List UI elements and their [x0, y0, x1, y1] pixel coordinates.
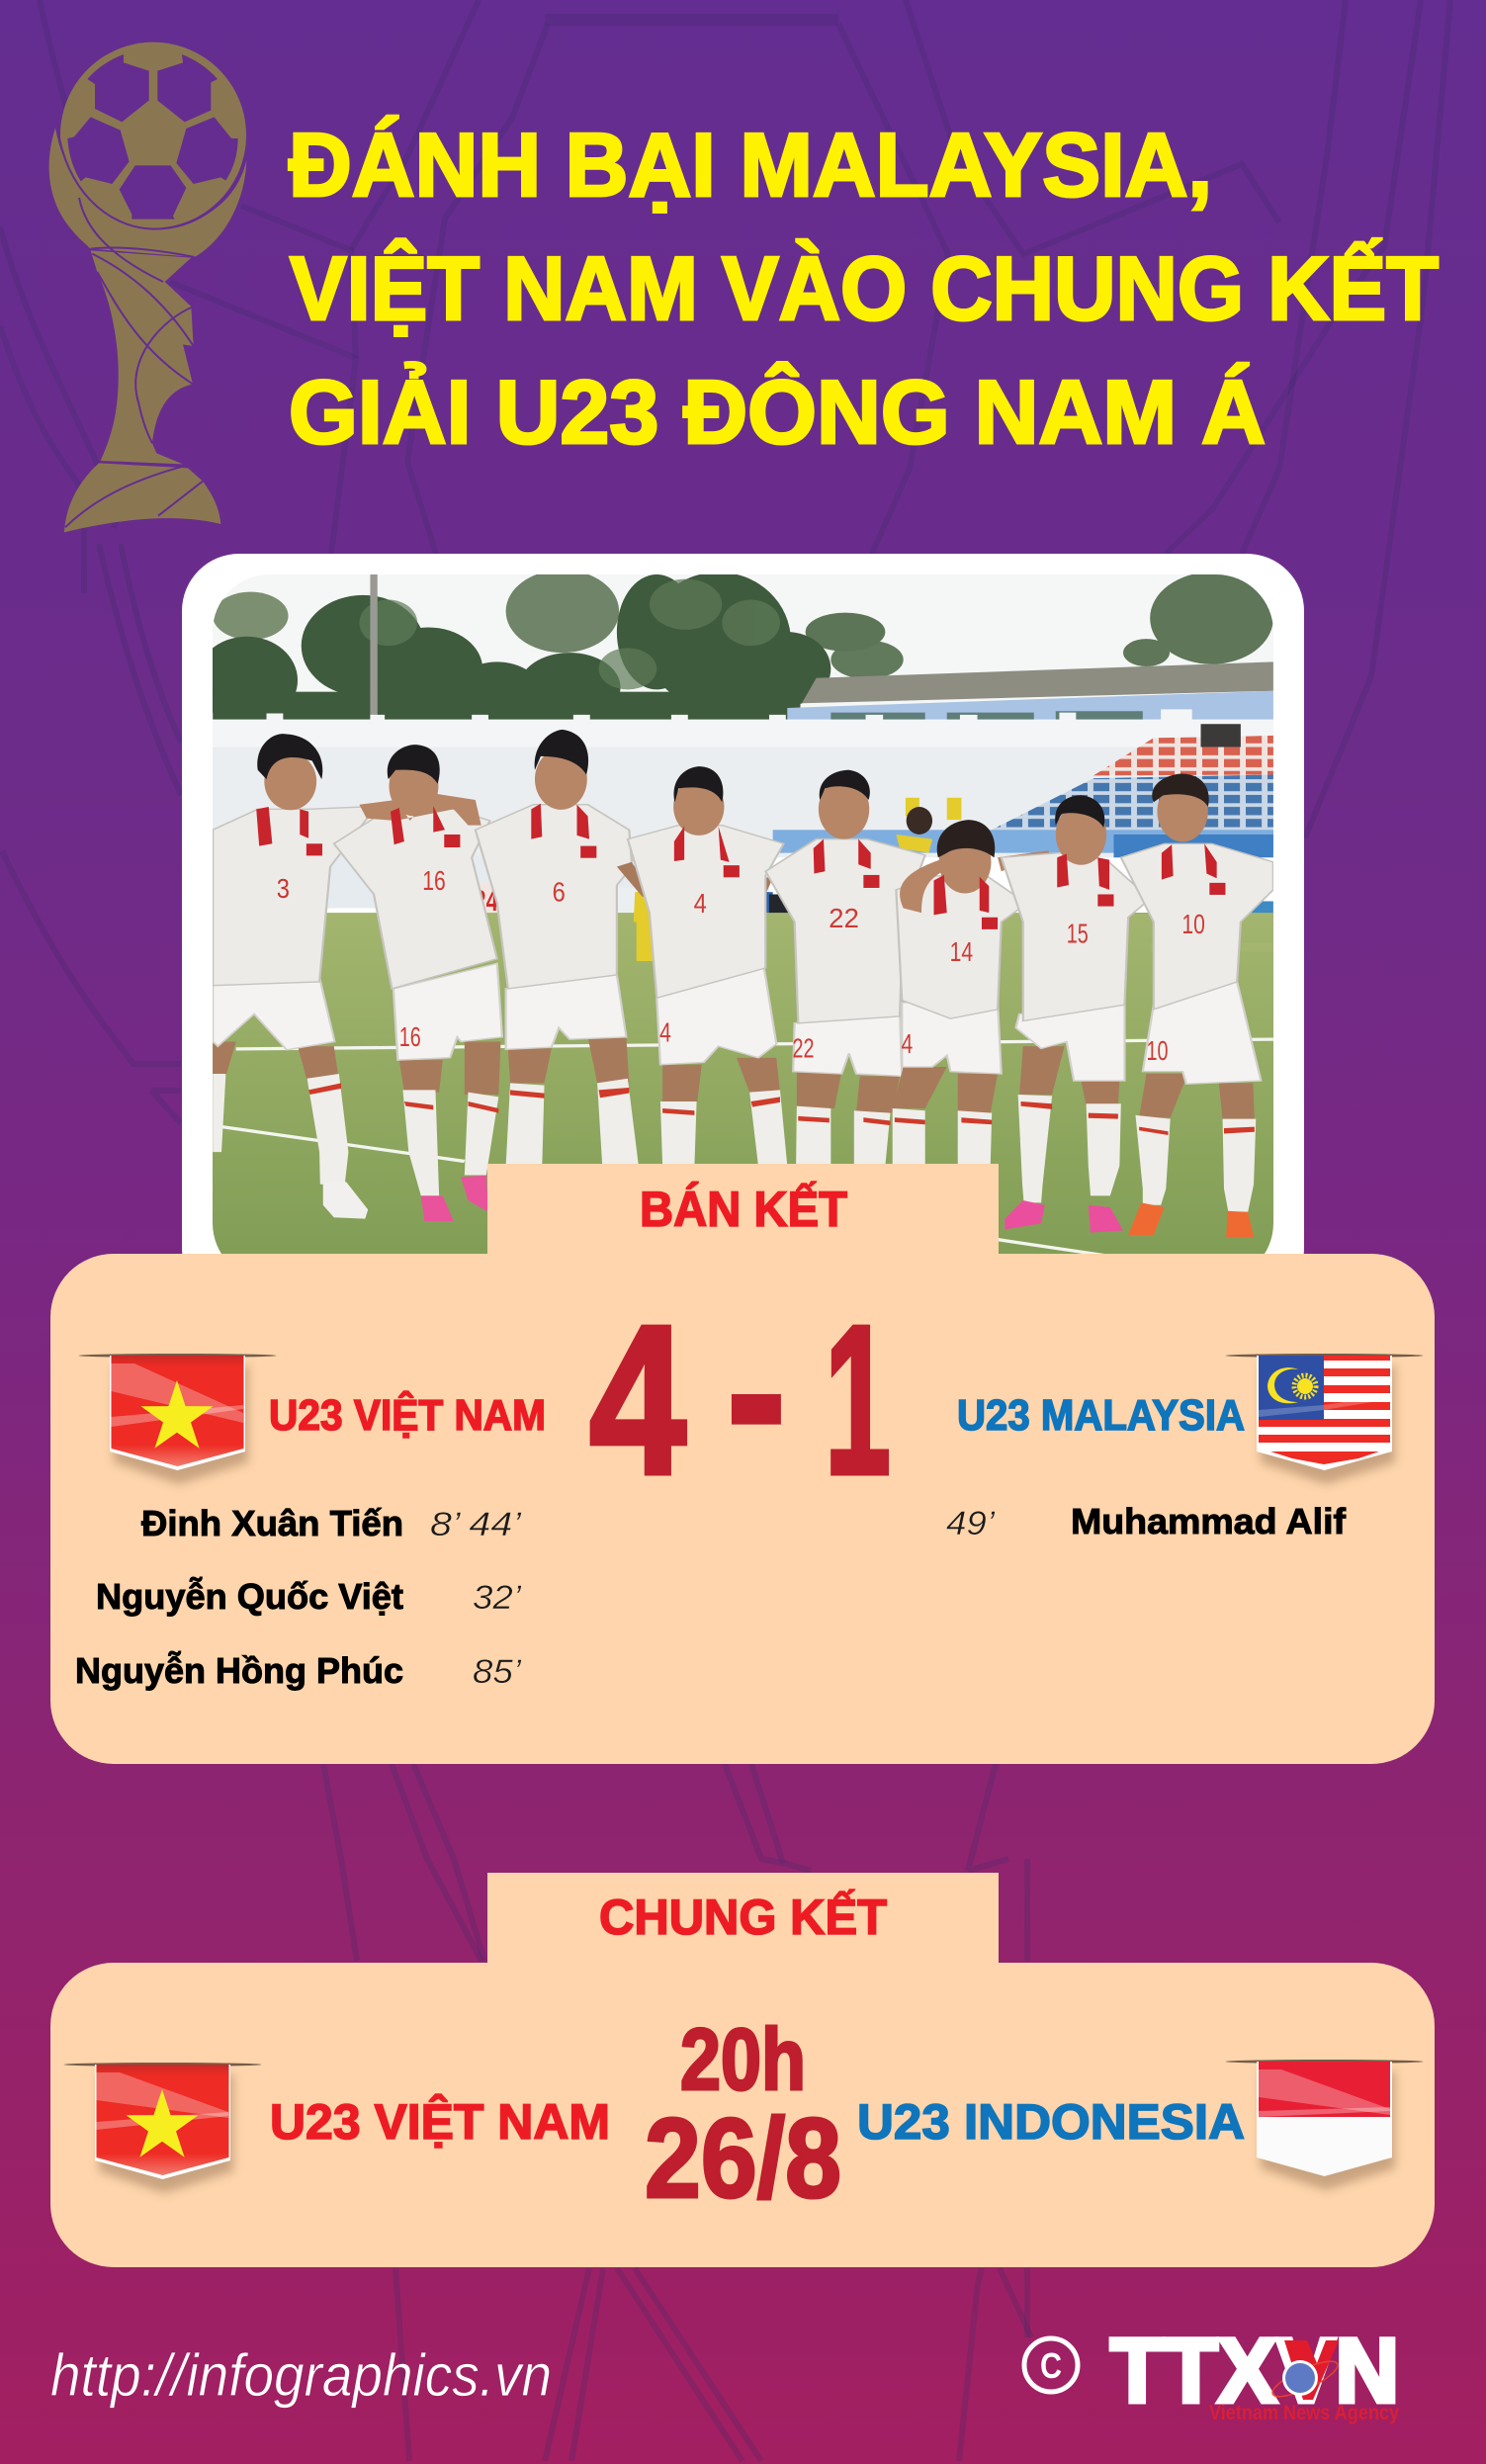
match time and date: 20h — [680, 2010, 806, 2108]
panel: photo white frame — [182, 554, 1304, 1305]
player 3 — [213, 734, 368, 1219]
title: ĐÁNH BẠI MALAYSIA, — [289, 116, 1212, 216]
title: GIẢI U23 ĐÔNG NAM Á — [289, 362, 1266, 463]
player 10: 10 — [1146, 1035, 1169, 1066]
player 3: 3 — [277, 873, 290, 904]
icon: Indonesia flag ribbon — [1226, 2060, 1424, 2190]
player 15: 15 — [1067, 918, 1089, 948]
tab: semi-final heading: BÁN KẾT — [640, 1182, 847, 1237]
photo: team of eight players on the pitch — [196, 570, 1280, 1281]
scoring minutes: Viet Nam: 32’ — [473, 1579, 521, 1617]
grass — [207, 913, 1280, 1281]
scorer: Malaysia: Muhammad Alif — [1071, 1501, 1347, 1541]
score 4 - 1: - — [727, 1272, 786, 1510]
score 4 - 1: 1 — [825, 1280, 891, 1519]
match time and date — [645, 2010, 841, 2222]
player 6: 6 — [553, 876, 566, 908]
score 4 - 1 — [589, 1272, 891, 1519]
player 14: 4 — [901, 1028, 913, 1059]
player 16: 16 — [422, 865, 446, 896]
tab: semi-final heading — [487, 1164, 999, 1255]
icon: copyright mark — [1024, 2338, 1078, 2392]
score 4 - 1: 4 — [589, 1280, 686, 1519]
scorers: Viet Nam: Nguyễn Hồng Phúc — [75, 1650, 403, 1691]
website url: http://infographics.vn — [50, 2342, 552, 2409]
scoring minute: Malaysia: 49’ — [946, 1505, 995, 1542]
player 10 — [1121, 774, 1273, 1237]
icon: gold football trophy — [49, 43, 246, 532]
player 16 — [334, 745, 502, 1221]
player 22 — [765, 770, 925, 1166]
tab: final heading: CHUNG KẾT — [599, 1890, 887, 1945]
player 15 — [1002, 795, 1150, 1233]
panel: final card — [50, 1963, 1435, 2267]
label: U23 Indonesia: U23 INDONESIA — [857, 2094, 1245, 2150]
player 16: 16 — [399, 1021, 421, 1052]
icon: Vietnam flag ribbon (final) — [63, 2063, 261, 2193]
match time and date: 26/8 — [645, 2096, 841, 2222]
player 4: 4 — [659, 1016, 671, 1048]
tab: final heading — [487, 1873, 999, 1964]
scoring minutes: Viet Nam — [430, 1506, 522, 1691]
label: U23 Malaysia: U23 MALAYSIA — [957, 1391, 1245, 1440]
player 14 — [893, 820, 1052, 1166]
player 4: 4 — [694, 888, 707, 919]
title: VIỆT NAM VÀO CHUNG KẾT — [290, 238, 1439, 339]
scoring minutes: Viet Nam: 8’ 44’ — [430, 1506, 522, 1543]
player 10: 10 — [1181, 909, 1205, 939]
icon: Vietnam flag ribbon (semi-final) — [79, 1354, 277, 1484]
title — [289, 116, 1439, 463]
player 6 — [476, 730, 639, 1166]
player 4 — [617, 766, 787, 1166]
scorers: Viet Nam: Đinh Xuân Tiến — [141, 1503, 403, 1543]
label: U23 Viet Nam (final): U23 VIỆT NAM — [270, 2094, 610, 2150]
player 14: 14 — [950, 936, 973, 967]
background figures — [634, 798, 961, 961]
logo: TTXVN: TTXVN — [1110, 2321, 1399, 2421]
player 22: 22 — [829, 903, 859, 933]
player 22: 22 — [792, 1033, 814, 1064]
icon: Malaysia flag ribbon — [1226, 1354, 1424, 1484]
sky and stadium background: 247 — [474, 884, 510, 918]
logo: TTXVN: Vietnam News Agency — [1209, 2402, 1399, 2424]
scoring minutes: Viet Nam: 85’ — [473, 1653, 521, 1691]
scorers: Viet Nam — [75, 1503, 403, 1691]
icon: copyright mark: C — [1040, 2345, 1062, 2386]
label: U23 Viet Nam: U23 VIỆT NAM — [269, 1390, 546, 1440]
sky and stadium background — [196, 570, 1280, 1281]
scorers: Viet Nam: Nguyễn Quốc Việt — [96, 1576, 403, 1617]
panel: semi-final result card — [50, 1254, 1435, 1764]
